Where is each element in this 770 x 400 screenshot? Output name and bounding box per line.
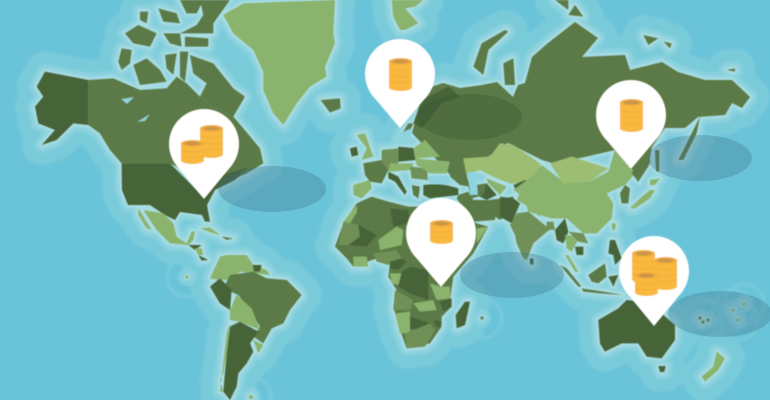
Africa xyxy=(335,197,488,348)
pin: Africa xyxy=(406,198,476,287)
North America xyxy=(35,0,263,222)
shadow ellipses xyxy=(218,94,770,337)
Madagascar and Tasmania xyxy=(456,302,666,372)
East and South Asia xyxy=(500,150,660,295)
inland seas xyxy=(121,97,478,195)
Greenland xyxy=(223,0,335,125)
icon: coin stack xyxy=(430,220,453,244)
Mexico and Caribbean xyxy=(138,208,233,261)
Australia xyxy=(598,300,675,358)
South America xyxy=(210,255,302,400)
Pacific islands xyxy=(186,276,746,399)
icon: coin stack xyxy=(620,99,643,132)
pin: Australia xyxy=(619,236,689,326)
Europe and central Asia xyxy=(350,133,540,222)
Russian islands xyxy=(392,0,735,160)
icon: coin stacks xyxy=(632,250,677,296)
pin: Asia xyxy=(596,80,666,169)
Scandinavia xyxy=(398,87,460,140)
icon: coin stacks xyxy=(181,125,223,164)
pin: Europe xyxy=(365,39,435,128)
Russia xyxy=(412,22,750,182)
New Zealand xyxy=(702,352,725,382)
pin: North America xyxy=(169,109,239,199)
Iceland xyxy=(321,98,341,113)
icon: coin stack xyxy=(389,58,412,91)
